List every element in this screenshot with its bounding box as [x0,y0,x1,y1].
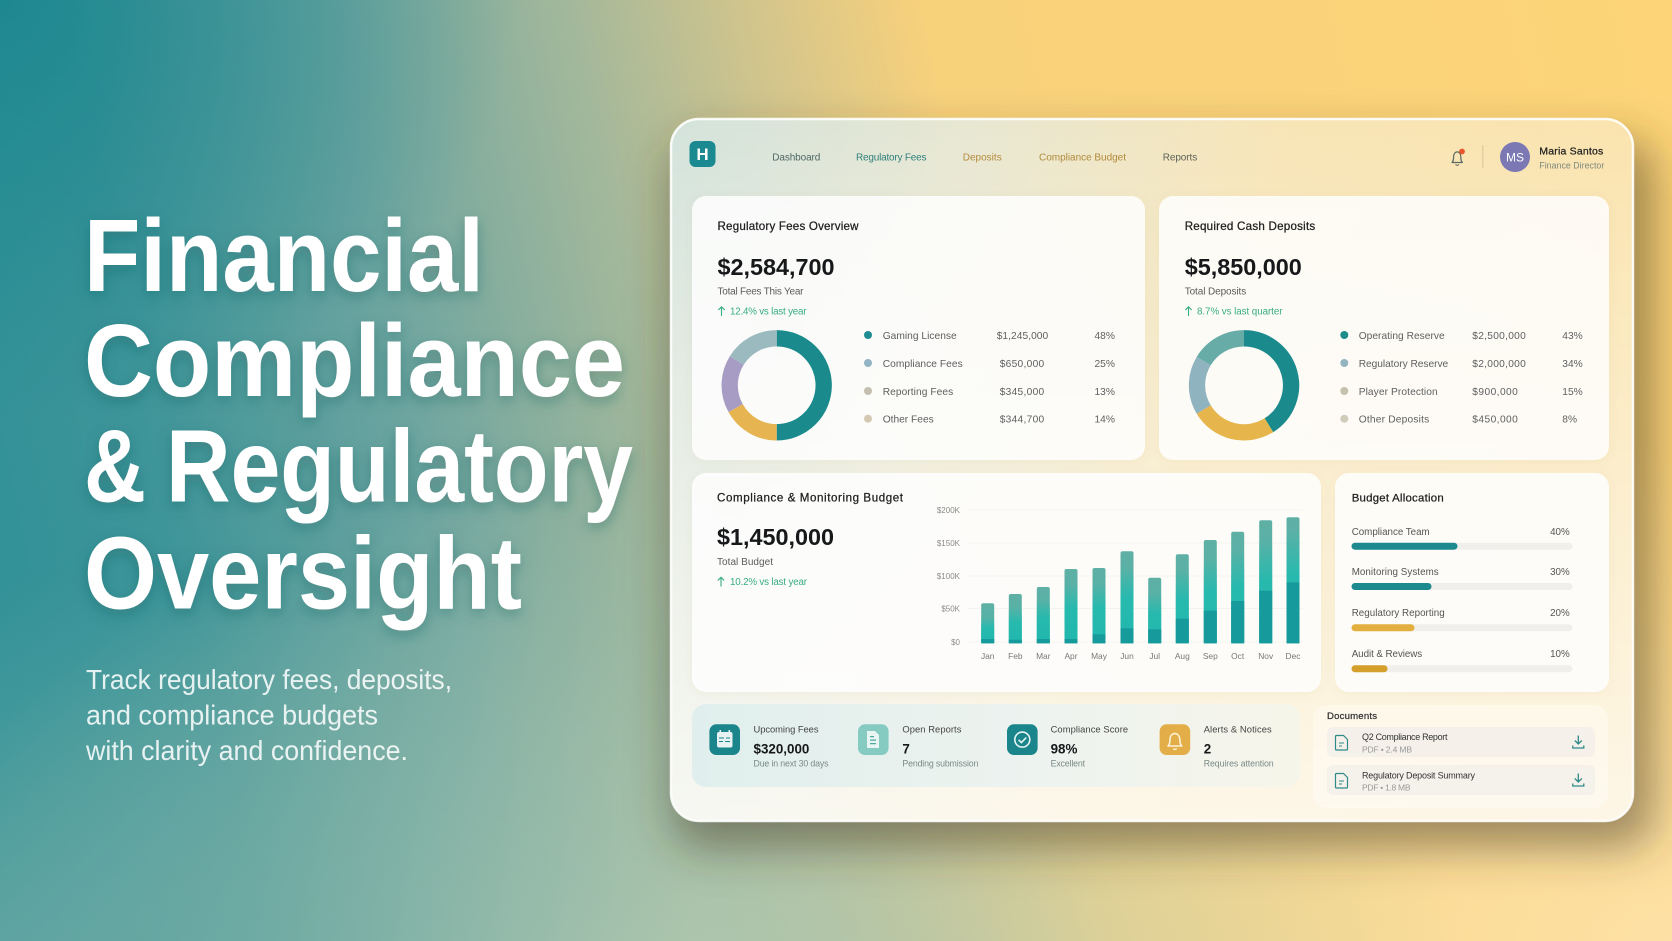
legend: fees: $344,700 [1000,415,1045,426]
stat: open reports: 7 [902,741,910,756]
logo [690,141,716,167]
title: & [84,408,146,524]
legend: deposits: 8% [1562,415,1577,426]
panel: documents: Documents [1327,711,1377,722]
legend: deposits: Player Protection [1359,387,1438,398]
dashboard shadow [672,140,1654,848]
panel: summary strip [692,704,1300,787]
subtitle: and compliance budgets [86,700,378,730]
bar chart: monthly budget: $150K [937,539,961,548]
legend: fees: 48% [1094,331,1115,342]
navigation [772,152,1197,164]
stat: compliance score: 98% [1051,741,1077,756]
legend: deposits: Regulatory Reserve [1359,359,1449,370]
legend: fees: 13% [1094,387,1115,398]
panel: budget allocation: 20% [1550,608,1570,619]
panel: budget allocation: 30% [1550,567,1570,578]
bar chart: monthly budget: $200K [937,506,961,515]
user profile: MS [1506,150,1524,164]
bar chart: monthly budget: Dec [1286,651,1300,661]
panel: budget allocation: Compliance Team [1352,527,1430,538]
document row: Q2 report: Q2 Compliance Report [1362,732,1448,742]
legend: deposits: $450,000 [1472,415,1518,426]
legend: fees: 14% [1094,415,1115,426]
bar chart: monthly budget: May [1091,651,1108,661]
user profile: Maria Santos [1539,145,1603,157]
bar chart: monthly budget: Jul [1149,651,1160,661]
stat: alerts and notices: Requires attention [1204,759,1274,769]
bar chart: monthly budget: $50K [941,604,961,613]
bar chart: monthly budget: Apr [1064,651,1078,661]
panel: required cash deposits: $5,850,000 [1185,254,1302,280]
bar chart: monthly budget: Aug [1175,651,1190,661]
bar chart: monthly budget: Oct [1231,651,1245,661]
document row: deposit summary: Regulatory Deposit Summary [1362,770,1476,780]
navigation: Regulatory Fees [856,152,926,164]
legend: deposits: Operating Reserve [1359,331,1445,342]
bar chart: monthly budget: Jan [981,651,995,661]
legend: fees: 25% [1094,359,1115,370]
panel: compliance and monitoring budget: Compliance & Monitoring Budget [717,492,904,505]
stat: alerts and notices [1160,724,1274,769]
stat: alerts and notices: 2 [1204,741,1211,756]
logo: H [696,145,709,164]
panel: budget allocation: Audit & Reviews [1352,649,1422,660]
bar chart: monthly budget: Sep [1203,651,1218,661]
legend: deposits: 43% [1562,331,1583,342]
panel: compliance and monitoring budget: $1,450,000 [717,524,834,550]
user profile [1500,142,1604,172]
panel: budget allocation [1335,473,1609,692]
bar chart: monthly budget: Mar [1036,651,1051,661]
panel: budget allocation: 10% [1550,649,1570,660]
legend: fees: Other Fees [883,415,934,426]
donut chart: fees [730,338,824,432]
legend: deposits: $2,500,000 [1472,331,1526,342]
stat: upcoming fees: $320,000 [754,741,809,756]
title [84,198,633,630]
panel: documents [1313,705,1608,808]
panel: budget allocation: Regulatory Reporting [1352,608,1445,619]
panel: required cash deposits [1159,196,1609,460]
legend: fees: $1,245,000 [997,331,1049,342]
title: Oversight [84,516,522,630]
legend: fees: $650,000 [1000,359,1045,370]
legend: fees: Compliance Fees [883,359,963,370]
stat: upcoming fees [709,724,829,769]
subtitle: with clarity and confidence. [85,735,408,766]
stat: compliance score: Compliance Score [1051,724,1128,735]
stat: open reports [858,724,978,769]
legend: deposits: $2,000,000 [1472,359,1526,370]
document row: Q2 report: PDF • 2.4 MB [1362,744,1412,754]
title: Compliance [84,303,625,418]
stat: alerts and notices: Alerts & Notices [1204,724,1272,735]
donut chart: deposits [1197,338,1291,432]
icon: notification bell [1452,149,1465,165]
panel: budget allocation: Budget Allocation [1352,493,1444,505]
panel: dashboard [671,119,1633,821]
legend: deposits [1340,331,1583,426]
document row: deposit summary: PDF • 1.8 MB [1362,783,1411,793]
document row: Q2 report [1327,727,1595,757]
bar chart: monthly budget: $0 [951,638,961,647]
navigation: Compliance Budget [1039,152,1126,164]
panel: regulatory fees overview [692,196,1145,460]
legend: fees: $345,000 [1000,387,1045,398]
trend: fees: 12.4% vs last year [730,307,807,318]
panel: compliance and monitoring budget: Total Budget [717,557,773,568]
panel: regulatory fees overview: Total Fees This Year [718,286,804,297]
panel: required cash deposits: Required Cash Deposits [1185,220,1315,233]
legend: fees: Gaming License [883,331,957,342]
bar chart: monthly budget: Jun [1120,651,1134,661]
bar chart: monthly budget: $100K [937,572,961,581]
title: Regulatory [166,408,633,524]
legend: deposits: $900,000 [1472,387,1518,398]
stat: open reports: Pending submission [902,759,978,769]
title: Financial [84,198,484,313]
panel: compliance and monitoring budget [692,473,1321,692]
stat: upcoming fees: Upcoming Fees [754,724,819,735]
subtitle [85,664,452,766]
bar chart: monthly budget: Nov [1258,651,1274,661]
legend: fees [864,331,1115,426]
stat: upcoming fees: Due in next 30 days [754,759,829,769]
legend: deposits: Other Deposits [1359,415,1429,426]
panel: budget allocation: 40% [1550,527,1570,538]
trend: budget: 10.2% vs last year [730,577,808,588]
user profile: Finance Director [1539,161,1604,171]
panel: regulatory fees overview: Regulatory Fees Overview [718,220,859,233]
panel: budget allocation: Monitoring Systems [1352,567,1439,578]
navigation: Deposits [963,152,1002,164]
bar chart: monthly budget: Feb [1008,651,1023,661]
subtitle: Track regulatory fees, deposits, [86,664,452,695]
panel: required cash deposits: Total Deposits [1185,286,1246,297]
bar chart: monthly budget [937,506,1303,661]
legend: deposits: 15% [1562,387,1583,398]
trend: deposits: 8.7% vs last quarter [1197,307,1283,318]
stat: compliance score [1007,724,1128,769]
legend: fees: Reporting Fees [883,387,953,398]
panel: regulatory fees overview: $2,584,700 [718,254,835,280]
stat: compliance score: Excellent [1051,759,1086,769]
navigation: Dashboard [772,152,820,164]
stat: open reports: Open Reports [902,724,962,735]
navigation: Reports [1163,152,1197,164]
legend: deposits: 34% [1562,359,1583,370]
document row: deposit summary [1327,765,1595,795]
